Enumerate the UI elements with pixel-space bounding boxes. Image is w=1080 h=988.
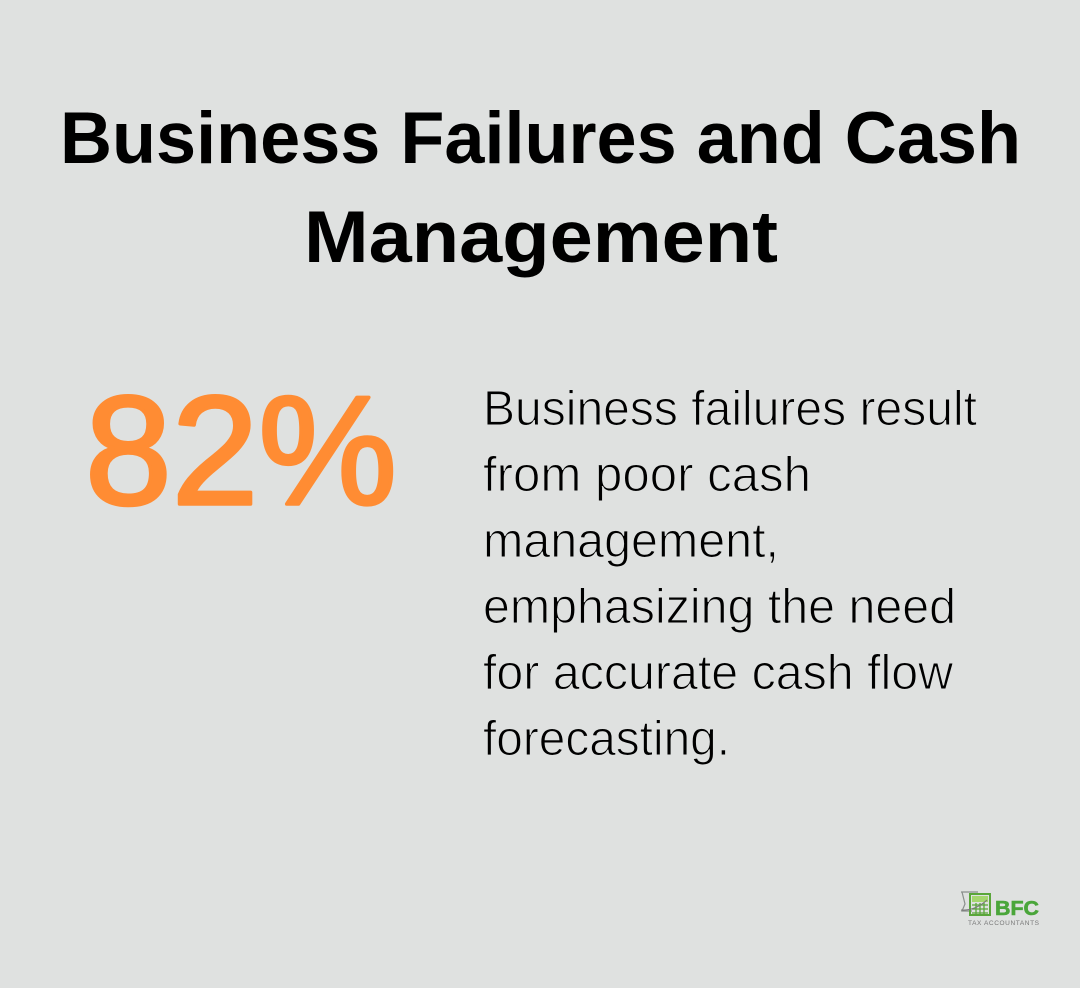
- description text: management,: [483, 514, 779, 568]
- title: [60, 98, 1021, 278]
- description text: forecasting.: [483, 712, 730, 766]
- description text: emphasizing the need: [483, 580, 956, 634]
- title: Management: [304, 197, 778, 278]
- logo: BFC Tax Accountants: [961, 892, 1040, 927]
- logo tagline: TAX ACCOUNTANTS: [968, 920, 1040, 927]
- description text: from poor cash: [483, 448, 811, 502]
- logo wordmark: BFC: [995, 898, 1039, 920]
- description text: [483, 382, 977, 766]
- description text: Business failures result: [483, 382, 977, 436]
- icon: calculator and papers: [961, 892, 990, 915]
- statistic: 82%: 82%: [85, 364, 397, 537]
- description text: for accurate cash flow: [483, 646, 954, 700]
- title: Business Failures and Cash: [60, 98, 1021, 179]
